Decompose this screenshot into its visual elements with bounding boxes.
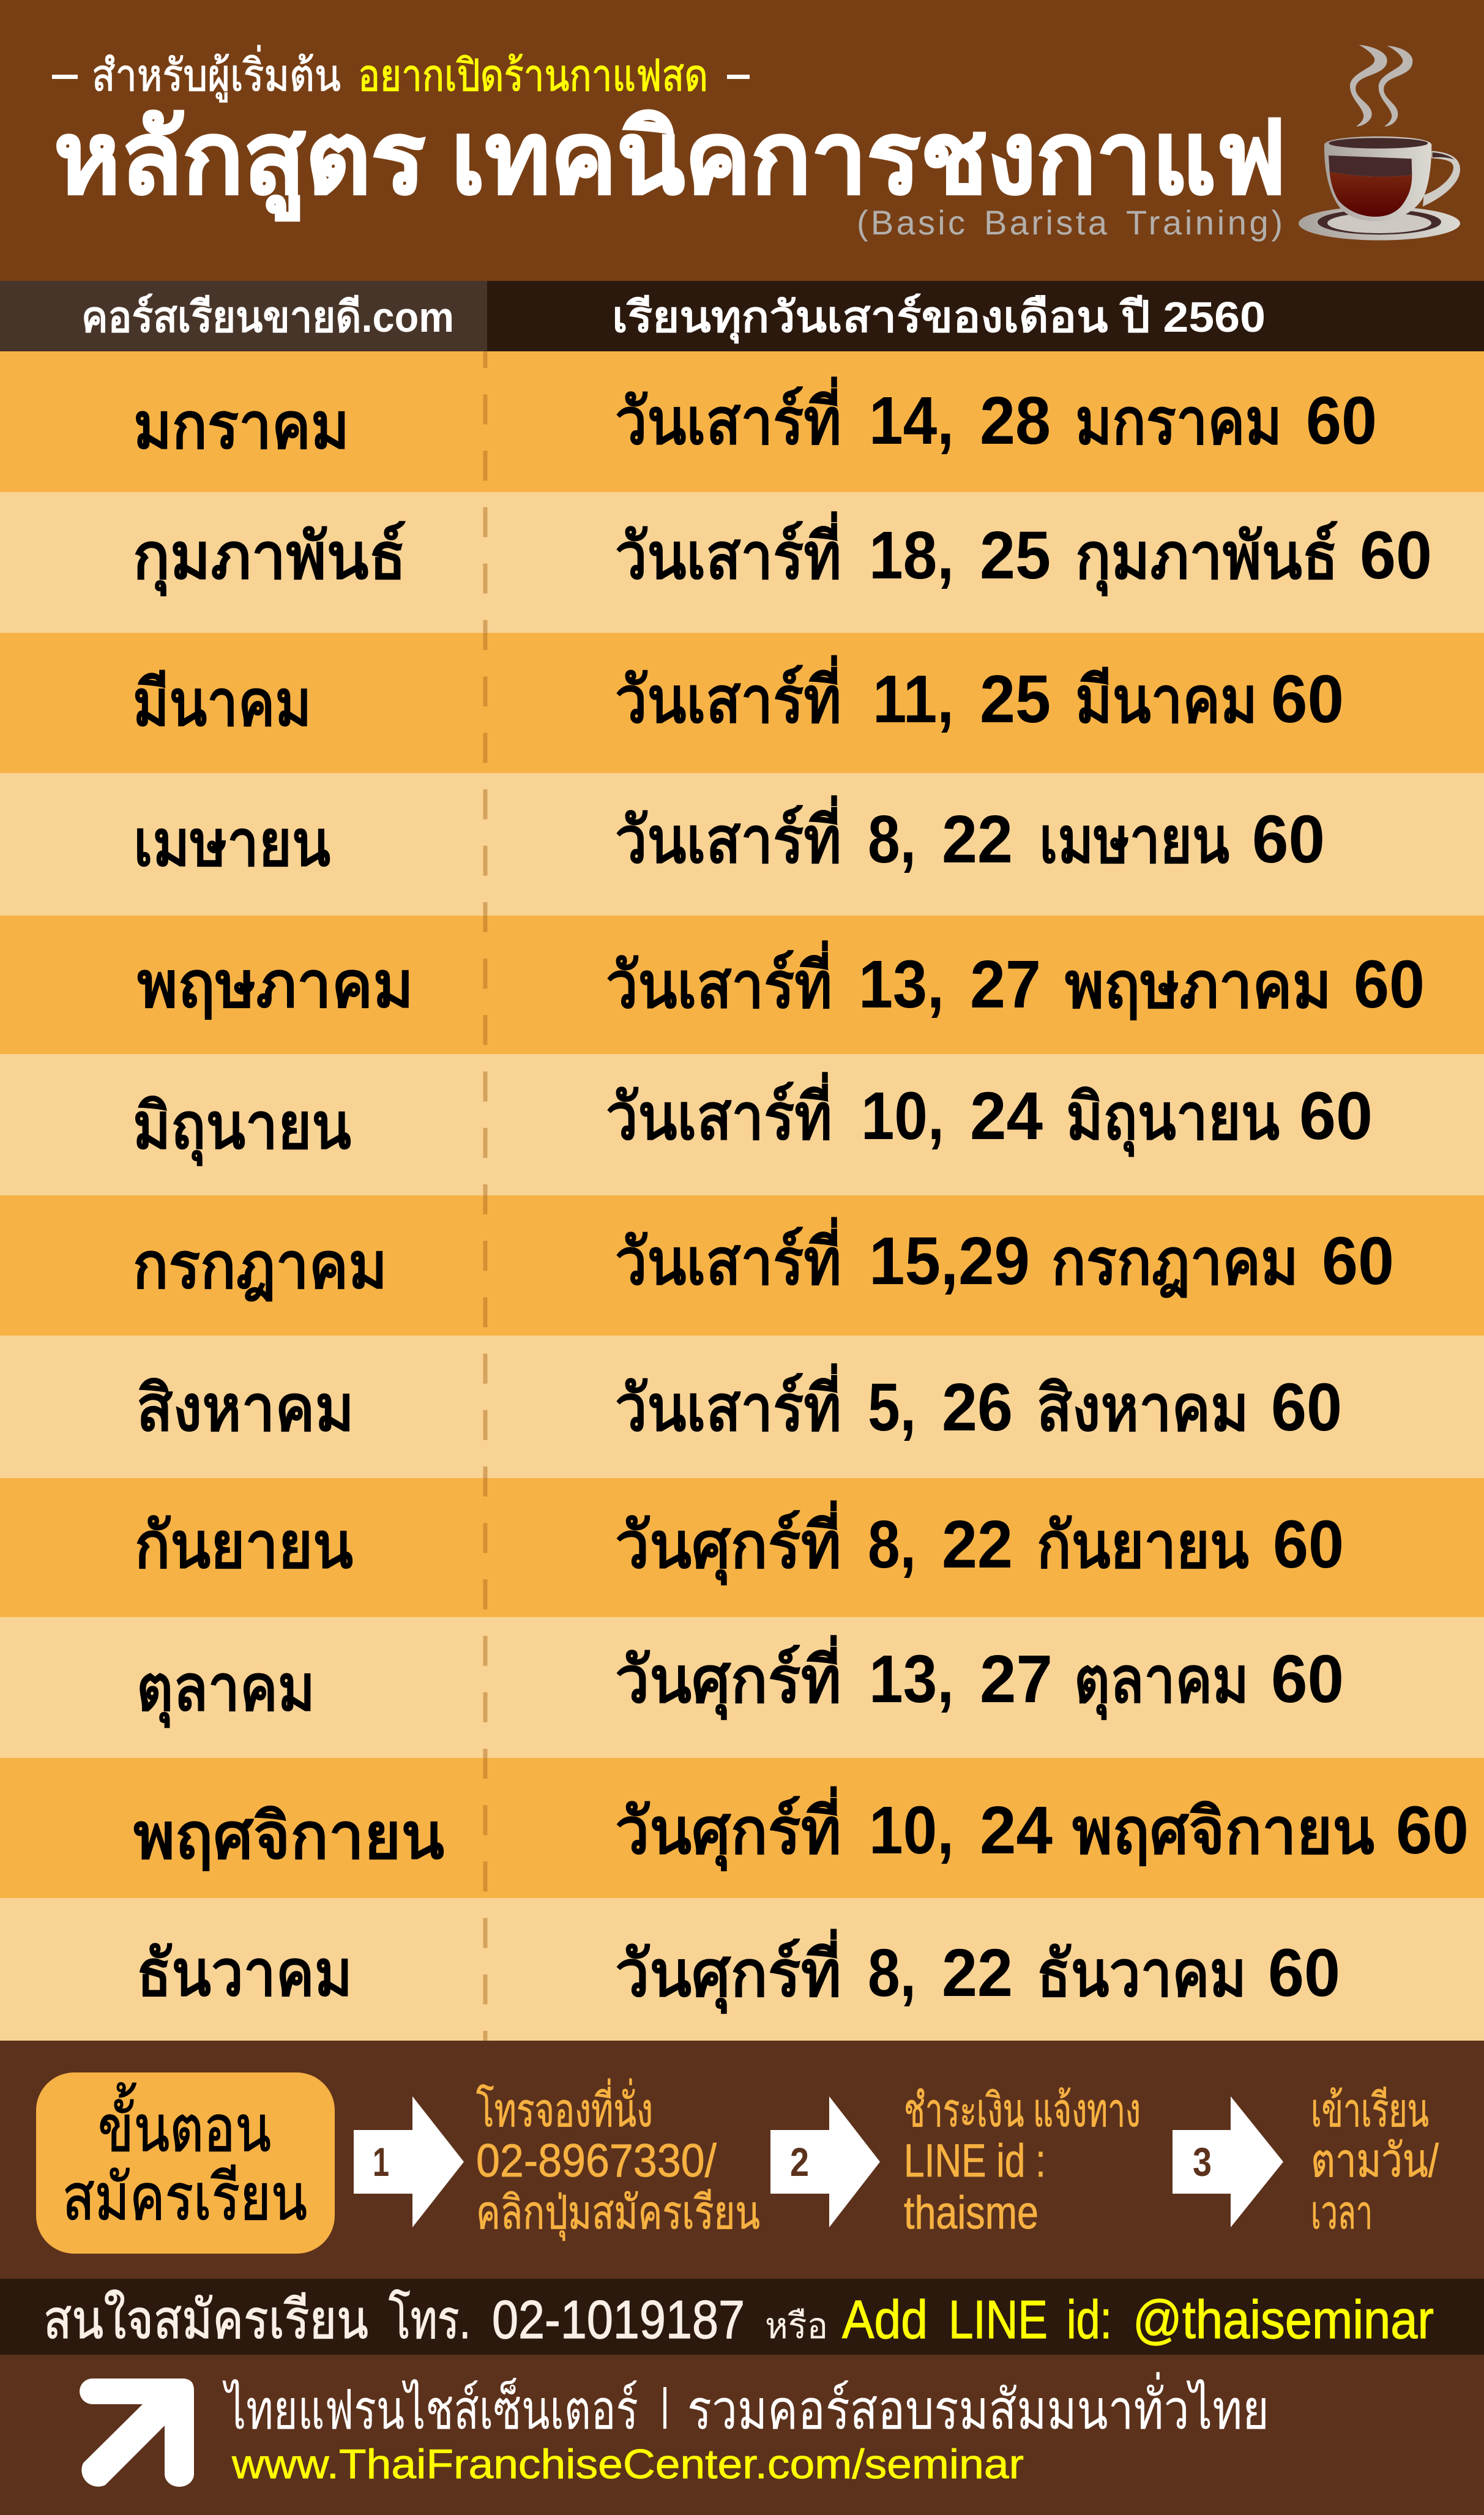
- row: June: มิถุนายน: [1066, 1082, 1280, 1157]
- row: June: [0, 1054, 1484, 1195]
- row: January: วันเสาร์ที่: [615, 376, 841, 458]
- row: March: 60: [1271, 662, 1344, 737]
- text: step 1 instructions: [476, 2079, 760, 2241]
- row: June: มิถุนายน: [133, 1091, 351, 1167]
- row: April: เมษายน: [1039, 805, 1229, 876]
- row: November: พฤศจิกายน: [1072, 1796, 1374, 1867]
- arrow: step 1: [354, 2096, 464, 2227]
- callout: registration steps label: สมัครเรียน: [62, 2162, 307, 2233]
- row: February: กุมภาพันธ์: [1075, 521, 1338, 597]
- row: July: [0, 1195, 1484, 1336]
- row: May: 60: [1354, 947, 1425, 1022]
- row: July: 15,29: [869, 1224, 1030, 1299]
- footer tagline: [222, 2372, 1269, 2441]
- row: February: [0, 492, 1484, 633]
- row: April: 22: [942, 802, 1013, 877]
- text: step 2 instructions: [904, 2085, 1141, 2239]
- row: December: [0, 1898, 1484, 2041]
- panel: contact bar: 02-1019187: [492, 2289, 745, 2350]
- row: October: วันศุกร์ที่: [615, 1635, 841, 1721]
- row: September: 60: [1273, 1507, 1344, 1582]
- footer tagline: รวมคอร์สอบรมสัมมนาทั่วไทย: [687, 2372, 1269, 2441]
- row: September: กันยายน: [135, 1510, 353, 1582]
- footer tagline: ไทยแฟรนไชส์เซ็นเตอร์: [222, 2377, 638, 2441]
- row: December: 22: [942, 1935, 1013, 2011]
- row: May: [0, 916, 1484, 1054]
- panel: contact bar: LINE: [949, 2289, 1048, 2350]
- panel: table header right: [487, 281, 1484, 351]
- row: September: กันยายน: [1037, 1510, 1249, 1582]
- text: step 2 instructions: ชำระเงิน แจ้งทาง: [904, 2085, 1141, 2137]
- arrow: step 3: [1173, 2096, 1283, 2227]
- row: November: 24: [980, 1793, 1053, 1868]
- panel: table header left: คอร์สเรียนขายดี.com: [81, 293, 454, 341]
- subtitle: [52, 45, 750, 102]
- row: August: 26: [942, 1370, 1013, 1445]
- title: เทคนิคการชงกาแฟ: [451, 102, 1286, 214]
- row: October: 13,: [869, 1642, 954, 1717]
- row: January: 28: [980, 383, 1051, 458]
- panel: contact bar: หรือ: [765, 2306, 828, 2346]
- row: November: 10,: [869, 1793, 954, 1868]
- row: September: 8,: [868, 1507, 916, 1582]
- row: August: 60: [1271, 1370, 1342, 1445]
- row: September: วันศุกร์ที่: [615, 1500, 841, 1586]
- icon: diagonal arrow logo: [80, 2379, 194, 2487]
- row: November: วันศุกร์ที่: [615, 1786, 841, 1872]
- text: step 1 instructions: คลิกปุ่มสมัครเรียน: [476, 2187, 760, 2241]
- panel: footer background: [0, 2355, 1484, 2515]
- row: October: [0, 1617, 1484, 1758]
- row: August: วันเสาร์ที่: [615, 1363, 841, 1444]
- row: April: 8,: [868, 802, 916, 877]
- row: May: พฤษภาคม: [1065, 950, 1332, 1022]
- row: January: มกราคม: [133, 391, 349, 462]
- subtitle: english course name: Training): [1126, 203, 1283, 242]
- row: March: มีนาคม: [1075, 665, 1258, 736]
- panel: contact bar: id:: [1067, 2289, 1112, 2350]
- panel: contact bar: [0, 2279, 1484, 2355]
- row: March: มีนาคม: [133, 668, 311, 739]
- row: February: วันเสาร์ที่: [615, 511, 841, 592]
- row: January: มกราคม: [1075, 386, 1282, 458]
- row: October: ตุลาคม: [1074, 1645, 1249, 1721]
- text: step 3 instructions: เวลา: [1311, 2187, 1373, 2239]
- row: January: 14,: [869, 383, 954, 458]
- row: April: 60: [1252, 802, 1325, 877]
- row: February: 60: [1360, 518, 1432, 593]
- row: November: พฤศจิกายน: [133, 1801, 444, 1872]
- panel: contact bar: Add: [842, 2289, 928, 2350]
- panel: registration steps background: [0, 2041, 1484, 2279]
- row: May: พฤษภาคม: [137, 949, 414, 1021]
- row: April: เมษายน: [133, 808, 330, 880]
- row: September: 22: [942, 1507, 1013, 1582]
- panel: table header left: [0, 281, 487, 351]
- text: step 2 instructions: thaisme: [904, 2187, 1038, 2239]
- row: May: 27: [970, 947, 1041, 1022]
- footer url: www.ThaiFranchiseCenter.com/seminar: [231, 2441, 1024, 2487]
- callout: registration steps label: ขั้นตอน: [98, 2082, 271, 2165]
- subtitle: อยากเปิดร้านกาแฟสด: [358, 51, 708, 100]
- row: December: 8,: [868, 1935, 916, 2011]
- row: March: 11,: [873, 662, 954, 737]
- row: January: 60: [1306, 383, 1377, 458]
- row: February: 18,: [869, 518, 954, 593]
- panel: contact bar: สนใจสมัครเรียน: [43, 2289, 368, 2350]
- title: [54, 102, 1286, 221]
- row: December: วันศุกร์ที่: [615, 1929, 841, 2014]
- row: August: 5,: [868, 1370, 916, 1445]
- text: step 1 instructions: 02-8967330/: [476, 2135, 717, 2187]
- subtitle: english course name: Barista: [984, 203, 1108, 242]
- panel: top header background: [0, 0, 1484, 281]
- row: March: วันเสาร์ที่: [615, 655, 841, 736]
- row: December: ธันวาคม: [136, 1938, 352, 2009]
- row: October: 60: [1271, 1642, 1344, 1717]
- text: step 3 instructions: ตามวัน/: [1311, 2135, 1439, 2187]
- row: January: [0, 351, 1484, 492]
- panel: table header right: เรียนทุกวันเสาร์ของเดือน ปี 2560: [612, 293, 1266, 344]
- row: June: 24: [970, 1078, 1043, 1154]
- panel: contact bar: @thaiseminar: [1133, 2289, 1434, 2350]
- row: August: สิงหาคม: [1037, 1373, 1249, 1444]
- arrow: step 1: 1: [373, 2139, 389, 2184]
- row: December: ธันวาคม: [1037, 1938, 1247, 2010]
- row: May: 13,: [859, 947, 944, 1022]
- row: November: [0, 1758, 1484, 1898]
- row: July: กรกฎาคม: [133, 1230, 387, 1302]
- subtitle: สำหรับผู้เริ่มต้น: [92, 45, 341, 102]
- row: September: [0, 1478, 1484, 1617]
- panel: contact bar: โทร.: [389, 2289, 471, 2350]
- subtitle: english course name: (Basic: [857, 203, 965, 242]
- row: August: สิงหาคม: [136, 1373, 354, 1444]
- row: December: 60: [1268, 1935, 1340, 2011]
- row: June: 60: [1299, 1078, 1373, 1154]
- text: step 3 instructions: เข้าเรียน: [1311, 2085, 1429, 2137]
- arrow: step 2: 2: [790, 2139, 809, 2184]
- subtitle: english course name: [857, 203, 1283, 242]
- row: May: วันเสาร์ที่: [606, 940, 832, 1022]
- row: July: 60: [1322, 1224, 1394, 1299]
- row: February: 25: [980, 518, 1051, 593]
- row: April: [0, 773, 1484, 916]
- text: step 3 instructions: [1311, 2085, 1439, 2239]
- row: July: วันเสาร์ที่: [615, 1217, 841, 1298]
- arrow: step 2: [770, 2096, 880, 2227]
- text: step 2 instructions: LINE id :: [904, 2135, 1046, 2187]
- row: November: 60: [1396, 1793, 1469, 1868]
- row: February: กุมภาพันธ์: [133, 521, 406, 597]
- arrow: step 3: 3: [1193, 2139, 1212, 2184]
- row: July: กรกฎาคม: [1051, 1227, 1299, 1299]
- row: June: 10,: [861, 1078, 944, 1154]
- callout: registration steps label: [36, 2072, 335, 2254]
- row: March: [0, 633, 1484, 773]
- icon: coffee cup with steam: [1299, 45, 1460, 241]
- text: step 1 instructions: โทรจองที่นั่ง: [476, 2079, 653, 2137]
- row: April: วันเสาร์ที่: [615, 795, 841, 876]
- row: October: ตุลาคม: [136, 1653, 315, 1728]
- row: June: วันเสาร์ที่: [606, 1072, 832, 1153]
- title: หลักสูตร: [54, 102, 425, 221]
- row: August: [0, 1336, 1484, 1478]
- row: October: 27: [980, 1642, 1053, 1717]
- row: March: 25: [980, 662, 1051, 737]
